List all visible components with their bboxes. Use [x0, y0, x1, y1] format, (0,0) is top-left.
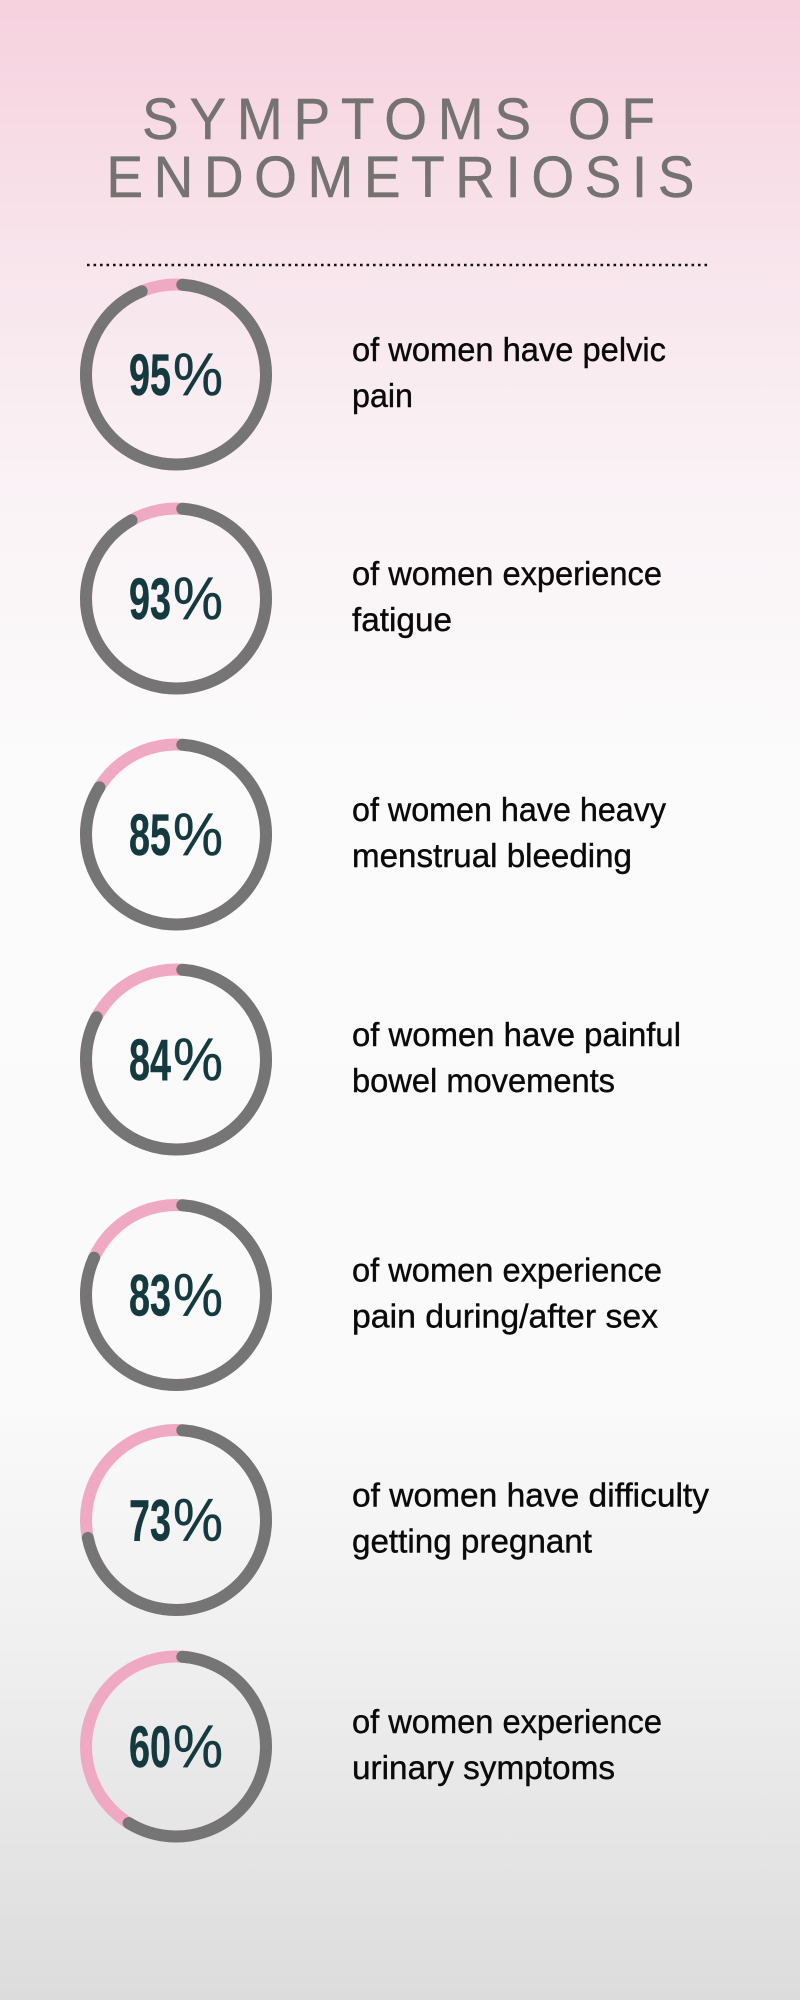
donut chart: 60%: % [173, 1713, 223, 1780]
donut chart: 73% [80, 1424, 272, 1616]
donut chart: 95% [80, 278, 272, 471]
text: heavy menstrual bleeding: of women have heavy [352, 792, 666, 829]
donut chart: 83%: % [173, 1262, 223, 1328]
row: 84% painful bowel movements [80, 963, 681, 1156]
text: pelvic pain: pain [352, 378, 413, 415]
title: SYMPTOMS OF [142, 87, 655, 151]
row: 60% urinary symptoms [80, 1650, 662, 1843]
donut chart: 83%: 83 [129, 1264, 171, 1328]
text: pain during/after sex: pain during/after sex [352, 1298, 658, 1336]
text: pain during/after sex [352, 1252, 662, 1336]
row: 85% heavy menstrual bleeding [80, 738, 666, 931]
donut chart: 73%: 73 [129, 1488, 171, 1554]
donut chart: 95%: % [173, 341, 223, 408]
text: fatigue: of women experience [352, 556, 662, 593]
donut chart: 83% [80, 1199, 272, 1391]
text: heavy menstrual bleeding [352, 792, 666, 875]
title [106, 87, 694, 209]
donut chart: 93% [80, 502, 272, 695]
text: urinary symptoms [352, 1704, 662, 1787]
donut chart: 73%: % [173, 1486, 223, 1554]
text: painful bowel movements: bowel movements [352, 1063, 615, 1100]
text: difficulty getting pregnant [352, 1478, 709, 1560]
donut chart: 84%: % [173, 1026, 223, 1093]
donut chart: 60%: 60 [129, 1715, 171, 1780]
dotted divider [87, 264, 708, 266]
text: painful bowel movements [352, 1017, 681, 1100]
donut chart: 84%: 84 [129, 1028, 171, 1093]
text: fatigue: fatigue [352, 602, 452, 639]
text: pelvic pain [352, 332, 666, 415]
donut chart: 93%: % [173, 565, 223, 632]
title: ENDOMETRIOSIS [106, 145, 694, 209]
row: 83% pain during/after sex [80, 1199, 662, 1391]
donut chart: 95%: 95 [129, 343, 171, 408]
donut chart: 85%: % [173, 801, 223, 868]
donut chart: 60% [80, 1650, 272, 1843]
row: 73% difficulty getting pregnant [80, 1424, 709, 1616]
donut chart: 84% [80, 963, 272, 1156]
donut chart: 85% [80, 738, 272, 931]
text: painful bowel movements: of women have painful [352, 1017, 681, 1054]
text: difficulty getting pregnant: of women have difficulty [352, 1478, 709, 1514]
row: 95% pelvic pain [80, 278, 666, 471]
text: urinary symptoms: urinary symptoms [352, 1750, 615, 1787]
text: pain during/after sex: of women experience [352, 1252, 662, 1290]
text: heavy menstrual bleeding: menstrual bleeding [352, 838, 632, 875]
text: urinary symptoms: of women experience [352, 1704, 662, 1741]
text: fatigue [352, 556, 662, 639]
row: 93% fatigue [80, 502, 662, 695]
text: pelvic pain: of women have pelvic [352, 332, 666, 369]
donut chart: 85%: 85 [129, 803, 171, 868]
text: difficulty getting pregnant: getting pregnant [352, 1524, 593, 1560]
donut chart: 93%: 93 [129, 567, 171, 632]
